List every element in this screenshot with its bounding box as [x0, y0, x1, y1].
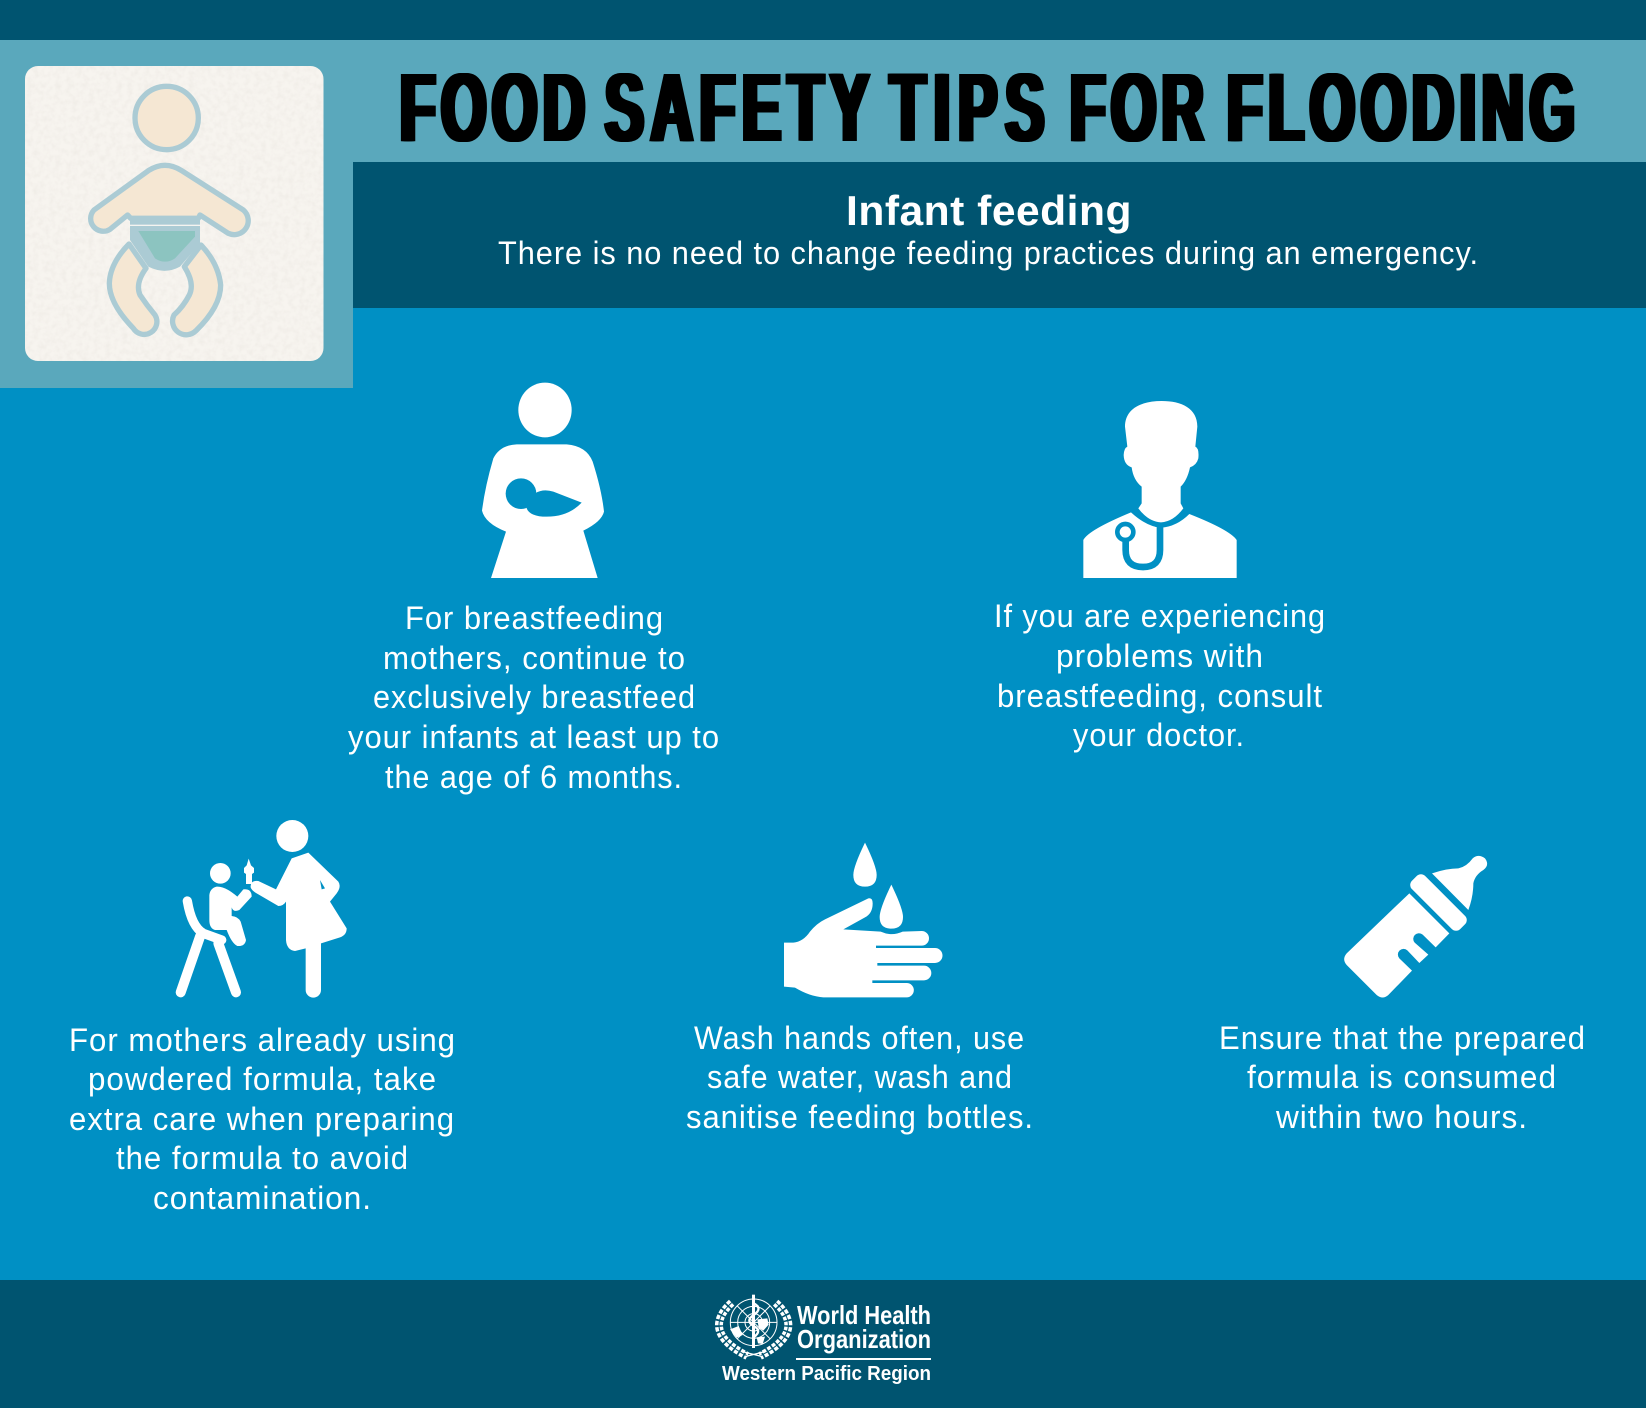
text: wash hands: sanitise feeding bottles. — [686, 1099, 1034, 1135]
text: consult doctor: breastfeeding, consult — [997, 678, 1323, 714]
text: powdered formula: contamination. — [153, 1180, 372, 1216]
title band — [0, 40, 1646, 162]
icon: doctor with stethoscope — [1083, 401, 1237, 578]
text: prepared formula — [1219, 1020, 1586, 1135]
text: breastfeeding mothers: your infants at least up to — [348, 719, 720, 755]
panel: subtitle band — [353, 162, 1646, 308]
text: wash hands: Wash hands often, use — [694, 1020, 1025, 1056]
text: powdered formula: powdered formula, take — [88, 1061, 437, 1097]
icon: mother holding infant — [482, 383, 604, 578]
title: TIPS — [890, 53, 1052, 162]
WHO wordmark: World Health — [797, 1300, 931, 1330]
text: wash hands — [686, 1020, 1034, 1135]
subtitle heading: Infant feeding — [846, 187, 1132, 234]
text: breastfeeding mothers: exclusively breastfeed — [373, 679, 696, 715]
text: breastfeeding mothers: the age of 6 months. — [385, 759, 683, 795]
top bar — [0, 0, 1646, 40]
text: powdered formula: extra care when preparing — [69, 1101, 455, 1137]
text: prepared formula: formula is consumed — [1247, 1059, 1557, 1095]
text: powdered formula: the formula to avoid — [116, 1140, 409, 1176]
title: FLOODING — [1227, 53, 1581, 162]
panel: icon backdrop — [0, 40, 353, 388]
text: consult doctor — [994, 598, 1326, 753]
icon: feeding bottle — [1344, 856, 1487, 997]
text: breastfeeding mothers: mothers, continue to — [383, 640, 686, 676]
text: powdered formula: For mothers already using — [69, 1022, 456, 1058]
text: consult doctor: problems with — [1056, 638, 1264, 674]
footer band — [0, 1280, 1646, 1408]
icon: mother feeding child with bottle — [181, 820, 347, 998]
text: breastfeeding mothers — [348, 600, 720, 795]
text: powdered formula — [69, 1022, 456, 1216]
icon: WHO emblem — [719, 1295, 788, 1357]
WHO wordmark: Western Pacific Region — [722, 1363, 931, 1385]
text: consult doctor: If you are experiencing — [994, 598, 1326, 634]
title: FOR — [1070, 53, 1209, 162]
WHO wordmark — [722, 1300, 931, 1385]
WHO wordmark: Organization — [797, 1324, 931, 1354]
text: breastfeeding mothers: For breastfeeding — [405, 600, 664, 636]
icon: hand with water drops — [784, 843, 942, 997]
text: consult doctor: your doctor. — [1073, 717, 1245, 753]
text: prepared formula: within two hours. — [1275, 1099, 1528, 1135]
title: FOOD — [400, 53, 590, 162]
subtitle text: There is no need to change feeding practices during an emergency. — [498, 235, 1479, 271]
text: prepared formula: Ensure that the prepared — [1219, 1020, 1586, 1056]
text: wash hands: safe water, wash and — [707, 1059, 1013, 1095]
icon: baby card — [25, 66, 324, 361]
title: SAFETY — [605, 53, 876, 162]
title — [400, 53, 1581, 162]
